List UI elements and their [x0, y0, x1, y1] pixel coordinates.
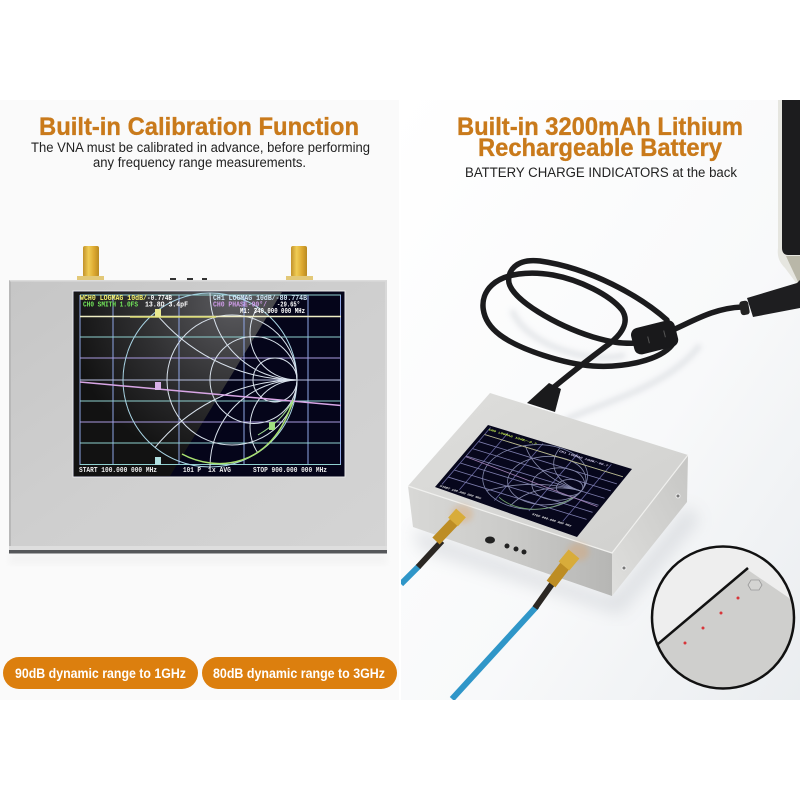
text block: screen readouts: CH0 SMITH 1.0FS — [83, 302, 138, 310]
heading: battery: Rechargeable Battery — [478, 134, 722, 162]
text block: angled screen readouts: START 100.000 000 MHz — [438, 485, 482, 501]
connector glow — [451, 505, 589, 561]
top face — [408, 393, 688, 553]
text block: angled screen readouts: CH0 LOGMAG 10dB/-0.7 — [487, 428, 538, 446]
callout: 80dB dynamic range: 80dB dynamic range to 3GHz — [213, 666, 385, 681]
text block: angled screen readouts — [438, 428, 621, 528]
icon: trace markers — [155, 309, 275, 465]
icon: USB cable with ferrite — [483, 261, 800, 412]
icon: USB-A plug — [739, 280, 800, 317]
icon: laptop — [778, 100, 800, 288]
text block: screen readouts: 101 P — [183, 467, 201, 475]
screen: angled Smith chart display — [435, 425, 632, 537]
text block: screen readouts: 1x AVG — [208, 467, 231, 475]
heading: battery — [457, 113, 743, 162]
callout: 90dB dynamic range: 90dB dynamic range to 1GHz — [15, 666, 186, 681]
callout: battery indicator magnifier — [650, 545, 796, 690]
panel: rechargeable battery — [362, 100, 800, 700]
text block: calibration description — [31, 140, 370, 170]
icon: ferrite bead — [631, 320, 678, 354]
right side face — [612, 455, 688, 596]
icon: right SMA connector — [286, 246, 313, 280]
icon: right gold connector — [551, 554, 574, 584]
front face — [408, 486, 612, 596]
heading: battery: Built-in 3200mAh Lithium — [457, 113, 743, 141]
screen: Smith chart display — [72, 290, 346, 478]
callout: 90dB dynamic range — [3, 657, 198, 689]
text block: angled screen readouts: STOP 900.000 000 MHz — [530, 513, 572, 528]
text block: screen readouts: START 100.000 000 MHz — [79, 467, 157, 475]
device: front view — [9, 280, 387, 554]
icon: left SMA connector — [77, 246, 104, 280]
text block: screen readouts: CH0 PHASE-90°/ — [213, 300, 267, 310]
chart: measurement traces — [80, 316, 341, 464]
heading: calibration: Built-in Calibration Function — [39, 113, 359, 141]
icon: charge LEDs — [684, 596, 740, 644]
icon: mini-USB plug — [527, 383, 561, 412]
icon: power button outline — [748, 580, 762, 590]
text block: calibration description: The VNA must be calibrated in advance, before performing — [31, 140, 370, 155]
panel: calibration function — [3, 116, 397, 689]
text block: calibration description: any frequency range measurements. — [93, 155, 306, 170]
icon: side screws — [622, 494, 680, 570]
text block: screen readouts: 13.8Ω 3.4pF — [145, 302, 188, 310]
icon: left gold connector — [436, 513, 461, 541]
edge highlights — [408, 455, 688, 553]
cable shadows — [512, 310, 700, 420]
text block: screen readouts: M1: 340.000 000 MHz — [240, 308, 305, 316]
callout: 80dB dynamic range — [202, 657, 397, 689]
icon: left blue cable — [401, 541, 442, 584]
text block: battery indicators: BATTERY CHARGE INDICATORS at the back — [465, 165, 737, 180]
text block: screen readouts: -0.774B — [147, 295, 173, 303]
device: angled view — [408, 393, 688, 596]
text block: screen readouts — [79, 295, 327, 475]
text block: screen readouts: STOP 900.000 000 MHz — [253, 467, 327, 475]
text block: screen readouts: WCH0 LOGMAG 10dB/ — [80, 295, 147, 303]
text block: screen readouts: -29.65° — [277, 300, 300, 310]
text block: angled screen readouts: CH1 LOGMAG 10dB/-80.7 — [558, 450, 609, 468]
device shadow — [413, 505, 700, 615]
chart: Smith circles — [122, 292, 298, 468]
icon: right blue cable — [452, 584, 552, 699]
icon: front ports — [485, 536, 526, 554]
icon: top buttons — [170, 278, 207, 280]
text block: screen readouts: CH1 LOGMAG 10dB/-80.774B — [213, 295, 308, 303]
